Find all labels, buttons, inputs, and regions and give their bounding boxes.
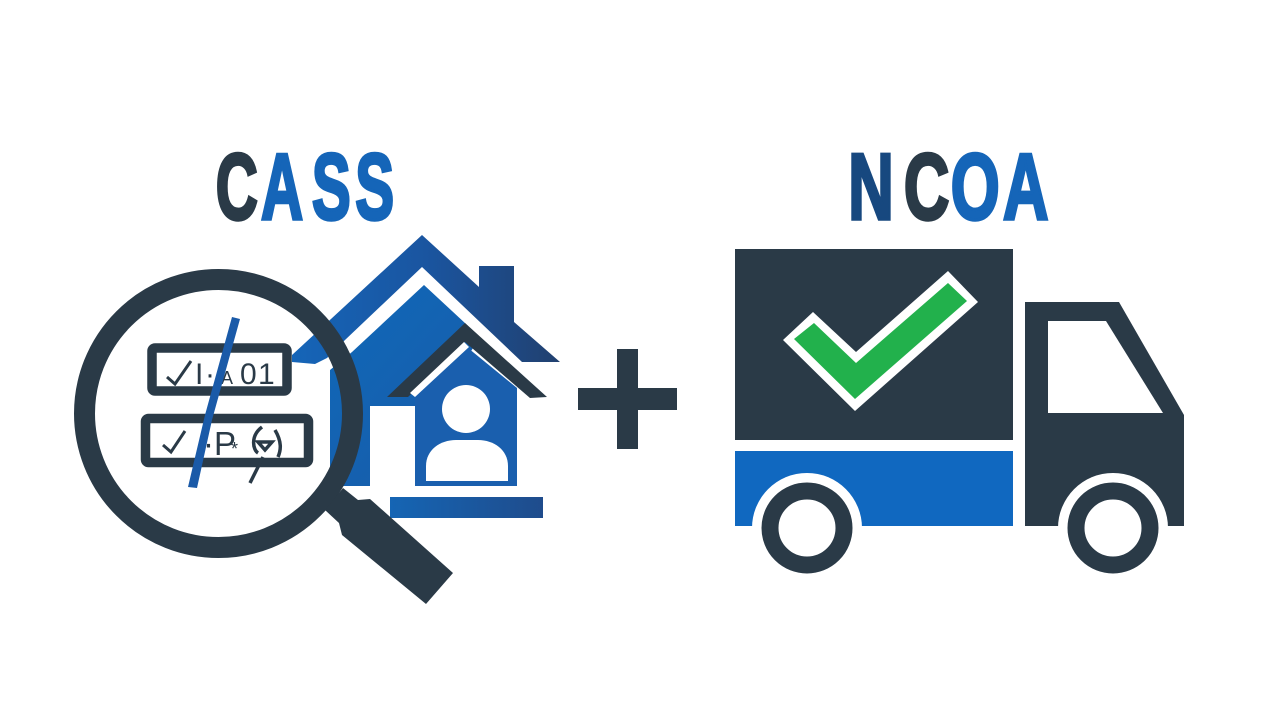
roof highlight stripe xyxy=(410,342,469,397)
resident shoulders xyxy=(426,440,508,481)
house roof with chimney xyxy=(292,235,560,364)
blue slash xyxy=(188,317,240,488)
heading: NCOA: NCOA xyxy=(848,134,1048,239)
rear wheel arch xyxy=(1058,473,1168,560)
icon: plus sign xyxy=(578,349,677,449)
address record rows xyxy=(146,317,308,488)
heading: CASS: CASS xyxy=(216,134,394,239)
rear wheel xyxy=(1076,491,1150,565)
check mark outline xyxy=(783,271,978,411)
inner house xyxy=(415,348,517,486)
green check mark xyxy=(794,283,967,399)
record row 1 xyxy=(152,348,287,391)
record row 1: I· A01 xyxy=(195,358,275,391)
house base bar xyxy=(390,497,543,518)
icon: magnifying glass lens xyxy=(84,280,352,548)
house body xyxy=(330,285,480,486)
resident head xyxy=(442,385,490,433)
truck cab xyxy=(1025,302,1184,526)
record row 2 xyxy=(146,418,308,483)
icon: magnifying glass ring and handle xyxy=(84,280,453,604)
icon: house with resident xyxy=(292,235,560,518)
front wheel arch xyxy=(752,473,862,560)
cab window xyxy=(1048,321,1163,413)
record row 2: ·P* xyxy=(203,425,238,462)
small roof xyxy=(387,323,547,398)
front wheel xyxy=(770,491,844,565)
truck cargo box xyxy=(735,249,1013,440)
icon: delivery truck xyxy=(735,249,1184,565)
truck blue stripe xyxy=(735,451,1013,526)
